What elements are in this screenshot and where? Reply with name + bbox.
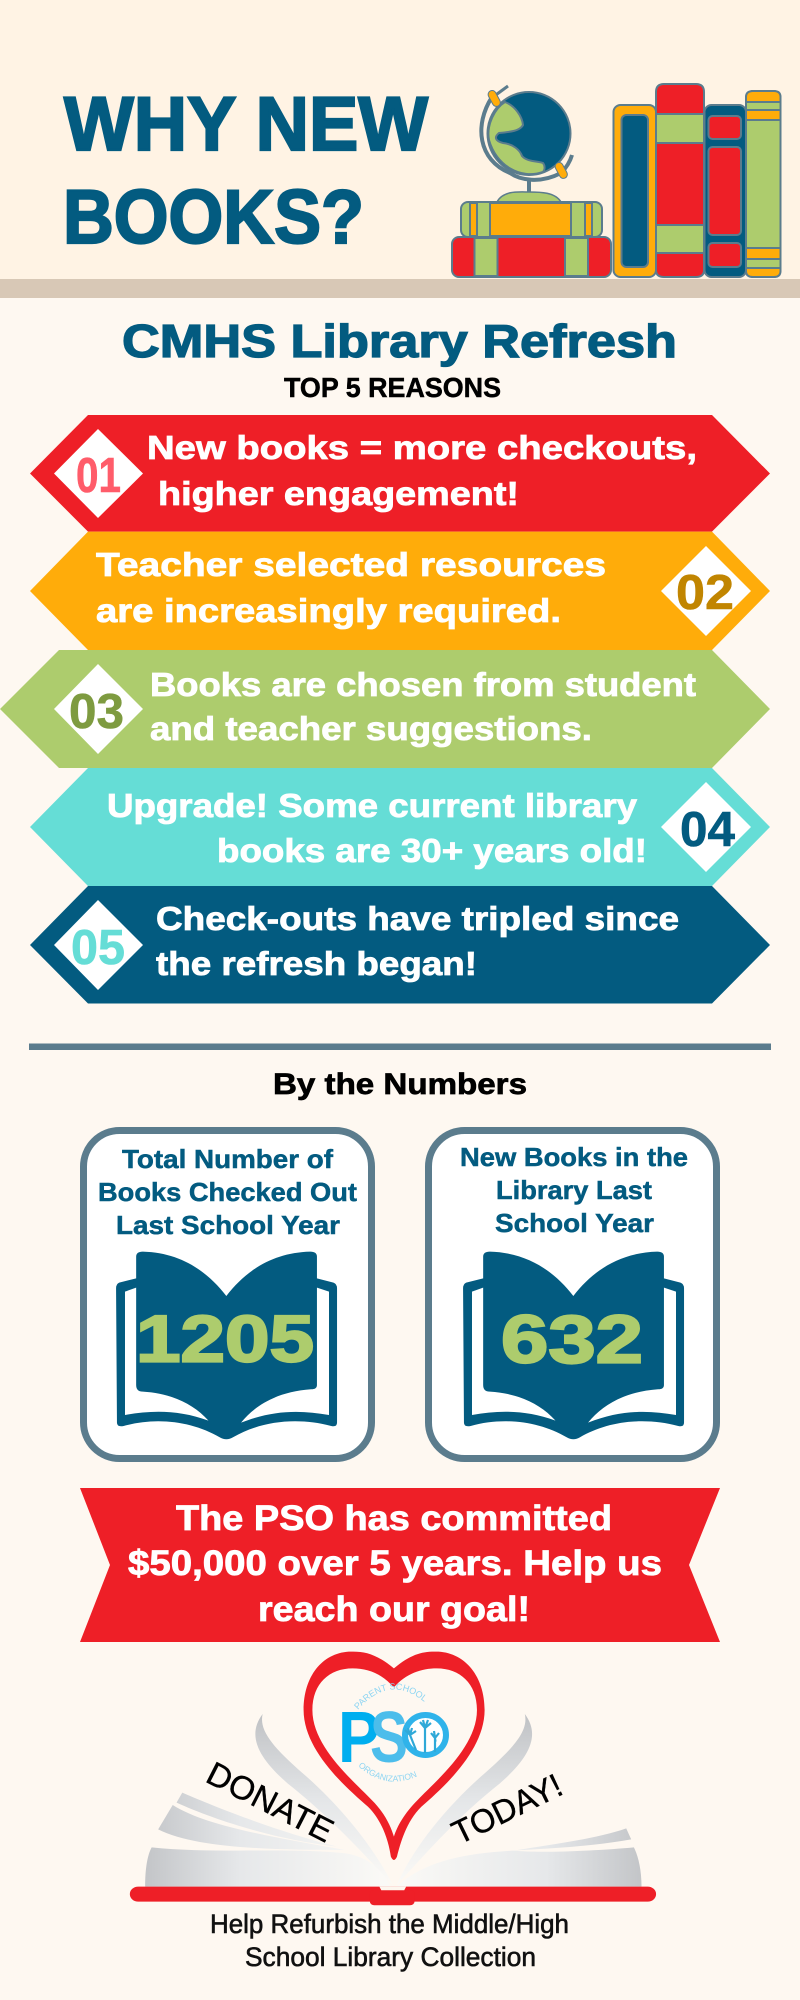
- card caption: Books Checked Out: [98, 1177, 357, 1207]
- icon: globe: [481, 86, 572, 202]
- icon: open book: [116, 1252, 337, 1439]
- title: BOOKS?: [63, 175, 364, 260]
- reason 2 banner: are increasingly required.: [96, 592, 561, 629]
- ribbon callout: The PSO has committed: [176, 1499, 612, 1538]
- stat number: 632: [501, 1302, 643, 1378]
- logo caption: School Library Collection: [245, 1942, 536, 1972]
- shelf: [0, 279, 800, 298]
- stat number: 1205: [136, 1302, 314, 1376]
- card caption: New Books in the: [460, 1142, 688, 1172]
- reason 3 banner: 03: [69, 685, 124, 739]
- reason 3 banner: [0, 650, 770, 768]
- ribbon callout: reach our goal!: [258, 1590, 530, 1629]
- donate logo: [130, 1652, 656, 1972]
- logo caption: [210, 1909, 569, 1972]
- heart outline: [304, 1652, 485, 1860]
- ribbon callout: [80, 1488, 720, 1642]
- card caption: Last School Year: [116, 1210, 340, 1240]
- icon: stacked books: [452, 202, 611, 277]
- card caption: Total Number of: [122, 1144, 333, 1174]
- PSO logo: P: [338, 1698, 380, 1778]
- stat card: new books: [428, 1130, 716, 1458]
- reason 4 banner: Upgrade! Some current library: [107, 787, 638, 824]
- card caption: [98, 1144, 357, 1240]
- reason 2 banner: [30, 532, 770, 650]
- reason 4 banner: books are 30+ years old!: [217, 832, 647, 869]
- today arc text: TODAY!: [446, 1766, 568, 1851]
- card caption: School Year: [495, 1208, 654, 1238]
- PSO logo: [338, 1683, 449, 1782]
- reason 5 banner: Check-outs have tripled since: [156, 900, 679, 937]
- header panel: [0, 0, 800, 298]
- reason 2 banner: 02: [676, 566, 734, 620]
- PSO logo: PARENT SCHOOL: [354, 1683, 426, 1710]
- reason 4 banner: 04: [680, 803, 735, 857]
- card caption: [460, 1142, 688, 1238]
- icon: upright books: [614, 84, 780, 277]
- logo caption: Help Refurbish the Middle/High: [210, 1909, 569, 1939]
- donate arc text: DONATE: [201, 1754, 340, 1849]
- ribbon callout: $50,000 over 5 years. Help us: [128, 1544, 662, 1583]
- stat card: books checked out: [84, 1130, 372, 1458]
- reason 1 banner: [30, 415, 770, 532]
- reason 5 banner: the refresh began!: [156, 945, 477, 982]
- reason 3 banner: Books are chosen from student: [150, 666, 696, 703]
- card caption: Library Last: [496, 1175, 652, 1205]
- heading: CMHS Library Refresh: CMHS Library Refresh: [122, 315, 677, 367]
- reason 1 banner: New books = more checkouts,: [147, 429, 697, 466]
- PSO logo: ORGANIZATION: [359, 1762, 417, 1782]
- subheading: top 5 reasons: TOP 5 REASONS: [284, 372, 501, 403]
- reason 2 banner: Teacher selected resources: [96, 546, 606, 583]
- reason 1 banner: 01: [76, 449, 121, 503]
- reason 5 banner: [30, 886, 770, 1004]
- reason 3 banner: and teacher suggestions.: [150, 710, 592, 747]
- heading: by the numbers: By the Numbers: [273, 1068, 527, 1101]
- title: WHY NEW: [64, 82, 428, 167]
- open book illustration: [130, 1714, 656, 1905]
- title: [63, 82, 428, 260]
- reason 5 banner: 05: [71, 921, 125, 975]
- icon: open book: [463, 1252, 684, 1439]
- reason 4 banner: [30, 768, 770, 886]
- PSO logo: S: [370, 1698, 408, 1778]
- reason 1 banner: higher engagement!: [158, 475, 519, 512]
